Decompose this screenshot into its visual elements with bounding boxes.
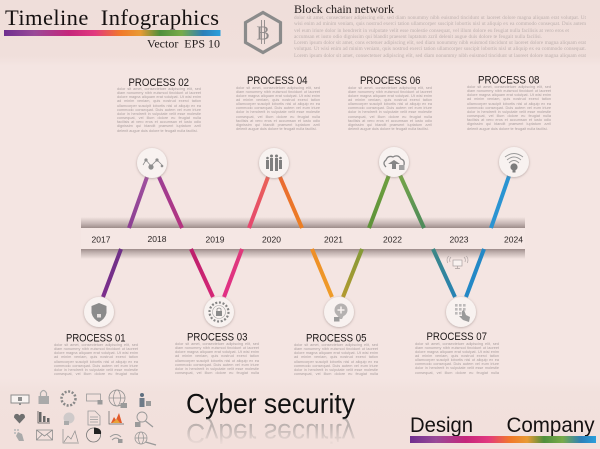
icon: blockchain hexagon — [246, 12, 280, 52]
blockchain heading: Block chain network — [294, 2, 394, 16]
text block: process 08: dolor sit amet, consectetuer adipiscing elit, sed diam nonummy nibh euismod tincidunt ut laoreet dolore magna aliquam erat volutpat. Ut wisi enim ad minim veniam, quis nostrud exerci tation ullamcorper suscipit lobortis nisl ut aliquip ex ea commodo consequat. Duis autem vel eum iriure dolor in hendrerit in vulputate velit esse molestie consequat, vel illum dolore eu feugiat nulla facilisis at vero eros et accumsan et iusto odio dignissim qui blandit praesent luptatum zzril delenit augue duis dolore te feugait nulla facilisi. — [467, 85, 551, 131]
icon: heart — [14, 414, 25, 424]
node: process 06 cloud icon — [379, 147, 409, 177]
subtitle: Vector EPS 10 — [147, 36, 220, 50]
cyber security heading: Cyber security — [186, 388, 355, 419]
icon: keypad hand — [14, 429, 24, 441]
blockchain body text — [294, 15, 586, 59]
icon: small wifi monitor — [447, 256, 468, 268]
year labels: 2019 — [206, 234, 225, 244]
year labels: 2018 — [148, 234, 167, 244]
process headings: PROCESS 06 — [360, 75, 420, 87]
process headings: PROCESS 05 — [306, 332, 366, 344]
company label: Company — [506, 414, 595, 437]
icon: pin lock — [64, 412, 74, 425]
node: process 05 plus pin icon — [324, 297, 354, 327]
year labels — [92, 234, 523, 244]
icon: gear — [62, 392, 76, 406]
footer background band — [0, 378, 600, 449]
year labels: 2022 — [383, 234, 402, 244]
icon: wifi lock — [110, 434, 122, 443]
icon: envelope — [36, 430, 52, 440]
blockchain body text: Lorem ipsum dolor sit amet, cons ectetuer adipiscing elit, sed diam nonummy nibh euismod tincidunt ut laoreet dolore magna aliquam erat — [294, 40, 586, 46]
footer rainbow bar — [410, 436, 596, 443]
process headings: PROCESS 04 — [247, 75, 308, 87]
icon: padlock — [38, 390, 49, 404]
icon: bars — [39, 412, 50, 422]
blockchain body text: dolor sit amet, consectetuer adipiscing elit, sed diam nonummy nibh euismod tincidunt ut laoreet dolore magna aliquam erat volutpat. Ut — [294, 15, 586, 21]
text block: process 06: dolor sit amet, consectetuer adipiscing elit, sed diam nonummy nibh euismod tincidunt ut laoreet dolore magna aliquam erat volutpat. Ut wisi enim ad minim veniam, quis nostrud exerci tation ullamcorper suscipit lobortis nisl ut aliquip ex ea commodo consequat. Duis autem vel eum iriure dolor in hendrerit in vulputate velit esse molestie consequat, vel illum dolore eu feugiat nulla facilisis at vero eros et accumsan et iusto odio dignissim qui blandit praesent luptatum zzril delenit augue duis dolore te feugait nulla facilisi. — [348, 86, 432, 131]
icon: colour area chart — [109, 411, 124, 424]
process headings: PROCESS 08 — [478, 74, 540, 86]
icon: line chart — [63, 429, 79, 443]
icon: pie chart — [86, 428, 101, 442]
icon: blockchain hexagon: B — [256, 22, 270, 44]
icon: magnifier lock — [135, 412, 153, 427]
blockchain body text: volutpat. Ut wisi enim ad minim veniam, quis nostrud exerci tation ullamcorper suscipit lobortis nisl ut aliquip ex ea commodo consequat. — [294, 46, 586, 52]
node: process 08 wifi bulb icon — [499, 147, 529, 177]
icon: magnifier globe — [135, 432, 156, 445]
blockchain body text: Lorem ipsum dolor sit amet, consectetuer adipiscing elit, sed diam nonummy nibh euismod tincidunt ut laoreet dolore magna aliquam erat — [294, 53, 586, 59]
connector lines — [103, 175, 509, 297]
year labels: 2020 — [262, 234, 281, 244]
icon: bar chart axis — [38, 411, 50, 423]
year labels: 2017 — [92, 234, 111, 244]
blockchain body text: vel eum iriure dolor in hendrerit in vulputate velit esse molestie consequat, vel illum dolore eu feugiat nulla facilisis at vero eros et — [294, 28, 569, 34]
title: Timeline Infographics — [5, 5, 219, 30]
node: process 02 network icon — [137, 148, 167, 178]
icon: card — [86, 394, 102, 404]
process headings: PROCESS 01 — [66, 332, 126, 344]
process headings: PROCESS 02 — [128, 77, 189, 89]
cyber security reflection: Cyber security — [186, 418, 355, 449]
icon: person lock — [140, 393, 151, 407]
icon: document — [88, 411, 100, 425]
year labels: 2024 — [504, 234, 523, 244]
icon: monitor lock — [11, 395, 29, 405]
text block: process 02: dolor sit amet, consectetuer adipiscing elit, sed diam nonummy nibh euismod tincidunt ut laoreet dolore magna aliquam erat volutpat. Ut wisi enim ad minim veniam, quis nostrud exerci tation ullamcorper suscipit lobortis nisl ut aliquip ex ea commodo consequat. Duis autem vel eum iriure dolor in hendrerit in vulputate velit esse molestie consequat, vel illum dolore eu feugiat nulla facilisis at vero eros et accumsan et iusto odio dignissim qui blandit praesent luptatum zzril delenit augue duis dolore te feugait nulla facilisi. — [117, 87, 201, 133]
year labels: 2023 — [450, 234, 469, 244]
process headings: PROCESS 03 — [187, 332, 248, 344]
blockchain body text: wisi enim ad minim veniam, quis nostrud exerci tation ullamcorper suscipit lobortis nisl ut aliquip ex ea commodo consequat. Duis autem — [294, 21, 586, 27]
header background band — [0, 0, 600, 66]
node: process 04 people icon — [259, 148, 289, 178]
blockchain body text: accumsan et iusto odio dignissim qui blandit praesent luptatum zzril delenit augue duis dolore te feugait nulla facilisi. — [294, 34, 542, 40]
node: process 03 gear lock icon — [204, 297, 234, 327]
node: process 07 keypad hand icon — [446, 297, 476, 327]
text block: process 04: dolor sit amet, consectetuer adipiscing elit, sed diam nonummy nibh euismod tincidunt ut laoreet dolore magna aliquam erat volutpat. Ut wisi enim ad minim veniam, quis nostrud exerci tation ullamcorper suscipit lobortis nisl ut aliquip ex ea commodo consequat. Duis autem vel eum iriure dolor in hendrerit in vulputate velit esse molestie consequat, vel illum dolore eu feugiat nulla facilisis at vero eros et accumsan et iusto odio dignissim qui blandit praesent luptatum zzril delenit augue duis dolore te feugait nulla facilisi. — [236, 86, 320, 131]
timeline band — [81, 217, 525, 259]
icon: globe lock — [109, 390, 127, 408]
title rainbow bar — [4, 30, 220, 36]
process headings — [66, 74, 540, 344]
node: process 01 shield icon — [84, 297, 114, 327]
year labels: 2021 — [324, 234, 343, 244]
process headings: PROCESS 07 — [426, 331, 487, 343]
icon set — [11, 390, 156, 445]
design label: Design — [410, 414, 473, 437]
